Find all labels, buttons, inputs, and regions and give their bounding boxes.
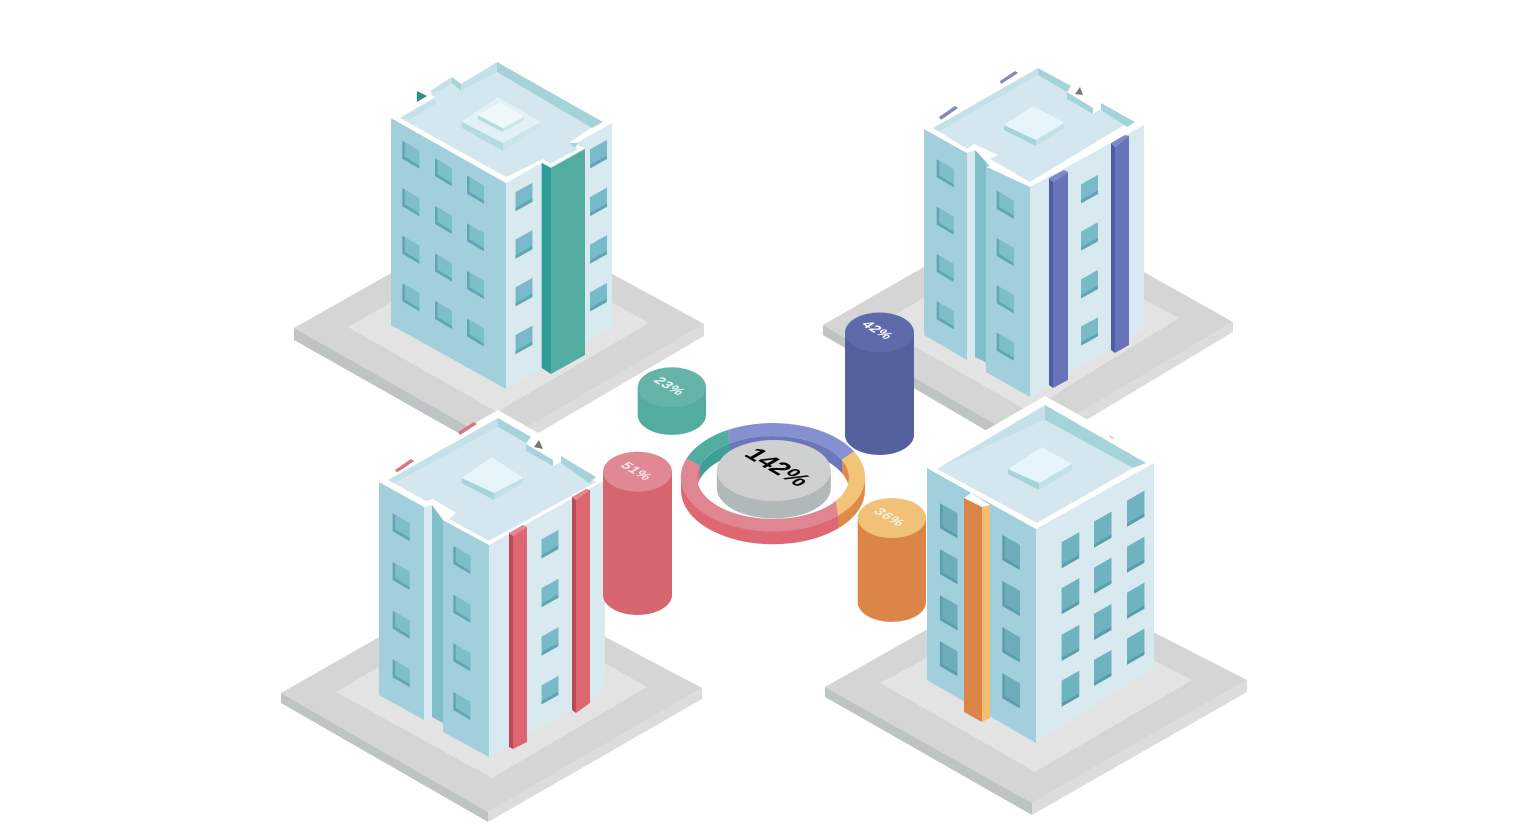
base plate <box>294 212 704 456</box>
roof <box>379 417 605 545</box>
building: teal, top left <box>294 60 704 456</box>
ring top: teal segment <box>687 430 730 466</box>
icon: teal roof marker <box>417 91 427 102</box>
roof unit <box>462 457 523 500</box>
ring top: pink segment <box>681 458 838 531</box>
ring top: yellow segment <box>836 451 865 516</box>
base plate <box>825 570 1247 815</box>
cylinder: blue 42% <box>845 312 914 455</box>
walls <box>391 118 612 389</box>
windows <box>393 513 558 720</box>
windows <box>940 491 1144 708</box>
ring inner wall <box>697 436 849 490</box>
cylinder: teal 23% <box>638 367 706 435</box>
walls <box>927 463 1154 743</box>
roof halo <box>440 410 545 450</box>
label: 23%: 23% <box>650 375 690 397</box>
red vertical strips <box>509 489 590 749</box>
building: blue, top right <box>823 67 1233 455</box>
building: orange, bottom right <box>825 396 1247 815</box>
blue vertical strips <box>1049 135 1129 388</box>
roof <box>391 60 612 183</box>
label: 36%: 36% <box>870 506 910 528</box>
label: 142%: 142% <box>738 444 817 490</box>
base plate <box>281 575 702 822</box>
center disc with total <box>717 440 831 518</box>
roof unit <box>1008 447 1072 490</box>
icon: orange roof marker <box>1109 435 1114 440</box>
building: red, bottom left <box>281 410 702 822</box>
icon: roof markers <box>939 71 1083 120</box>
walls <box>379 480 605 757</box>
cylinder: orange 36% <box>858 498 926 622</box>
cylinder: red 51% <box>603 452 672 615</box>
windows <box>937 159 1098 361</box>
windows: right face <box>516 140 607 354</box>
label: 51%: 51% <box>617 460 657 482</box>
roof <box>927 401 1154 529</box>
roof <box>924 67 1144 187</box>
teal vertical strip <box>542 149 585 374</box>
roof halo <box>920 396 1160 530</box>
donut chart: ring segments <box>681 423 865 544</box>
roof unit <box>462 97 541 151</box>
roof unit <box>1004 106 1064 146</box>
label: 42%: 42% <box>858 319 898 341</box>
windows: left face <box>402 141 484 346</box>
orange vertical strip <box>964 493 990 722</box>
ring outer wall <box>681 477 865 544</box>
icon: roof markers <box>395 422 543 473</box>
walls <box>924 125 1144 397</box>
ring top: blue segment <box>728 423 854 460</box>
base plate <box>823 207 1233 455</box>
